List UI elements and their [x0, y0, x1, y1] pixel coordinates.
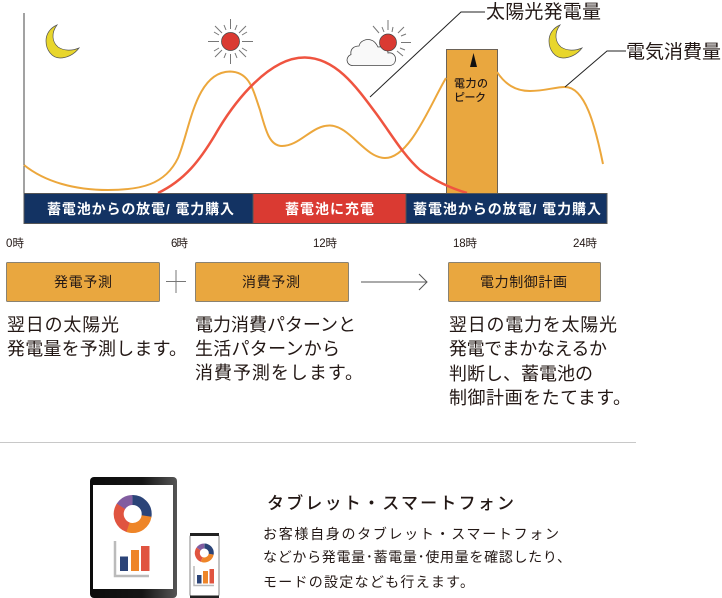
text: control plan description: 発電でまかなえるか	[449, 339, 607, 359]
solar generation curve	[158, 57, 467, 193]
panel: energy chart	[6, 1, 721, 250]
step: consumption forecast: 消費予測	[242, 274, 300, 290]
text: generation forecast description	[7, 315, 187, 359]
text: control plan description: 翌日の電力を太陽光	[449, 315, 617, 335]
text: tablet description: お客様自身のタブレット・スマートフォン	[263, 526, 559, 542]
time axis labels: 18時	[453, 237, 478, 250]
electricity consumption curve after peak	[497, 72, 603, 164]
icon: tablet	[90, 477, 177, 598]
text: tablet description	[263, 526, 571, 590]
text: consumption forecast description: 生活パターンから	[195, 339, 340, 359]
arrow	[361, 274, 427, 290]
peak power column: ピーク	[454, 91, 486, 104]
time axis labels: 6時	[171, 237, 188, 250]
battery status bar: 蓄電池からの放電/ 電力購入	[47, 201, 234, 217]
icon: moon right	[549, 25, 582, 58]
text: control plan description: 制御計画をたてます。	[449, 388, 631, 408]
time axis labels: 12時	[313, 237, 338, 250]
step: consumption forecast	[196, 262, 348, 302]
text: tablet description: などから発電量･蓄電量･使用量を確認したり、	[263, 549, 571, 565]
time axis labels	[6, 237, 598, 250]
electricity consumption label	[565, 41, 721, 87]
text: generation forecast description: 翌日の太陽光	[7, 315, 119, 335]
step: power control plan: 電力制御計画	[480, 274, 567, 290]
solar generation label	[370, 1, 601, 97]
step: power control plan	[448, 262, 600, 302]
electricity consumption label: 電気消費量	[626, 41, 721, 63]
peak power column	[446, 50, 498, 194]
time axis labels: 0時	[6, 237, 24, 250]
icon: plus	[166, 270, 186, 293]
step: generation forecast: 発電予測	[54, 274, 112, 290]
text: control plan description	[449, 315, 631, 408]
icon: moon left	[46, 25, 79, 58]
icon: sun	[208, 19, 253, 64]
electricity consumption curve	[24, 72, 446, 190]
solar generation label: 太陽光発電量	[486, 1, 601, 23]
icon: smartphone	[190, 533, 219, 598]
battery status bar	[24, 194, 607, 224]
heading: tablet and smartphone: タブレット・スマートフォン	[267, 493, 514, 513]
battery status bar: 蓄電池からの放電/ 電力購入	[413, 201, 601, 217]
text: generation forecast description: 発電量を予測します。	[7, 339, 187, 359]
text: control plan description: 判断し、蓄電池の	[449, 364, 593, 384]
battery status bar: 蓄電池に充電	[285, 201, 374, 217]
text: consumption forecast description	[195, 315, 363, 383]
divider	[0, 442, 636, 444]
peak power column: 電力の	[454, 77, 488, 90]
chart axis	[23, 13, 25, 193]
text: consumption forecast description: 電力消費パターンと	[195, 315, 356, 335]
text: consumption forecast description: 消費予測をします。	[195, 363, 363, 383]
time axis labels: 24時	[573, 237, 598, 250]
step: generation forecast	[6, 262, 160, 302]
text: tablet description: モードの設定なども行えます。	[263, 574, 474, 590]
icon: sun behind cloud	[347, 20, 411, 66]
